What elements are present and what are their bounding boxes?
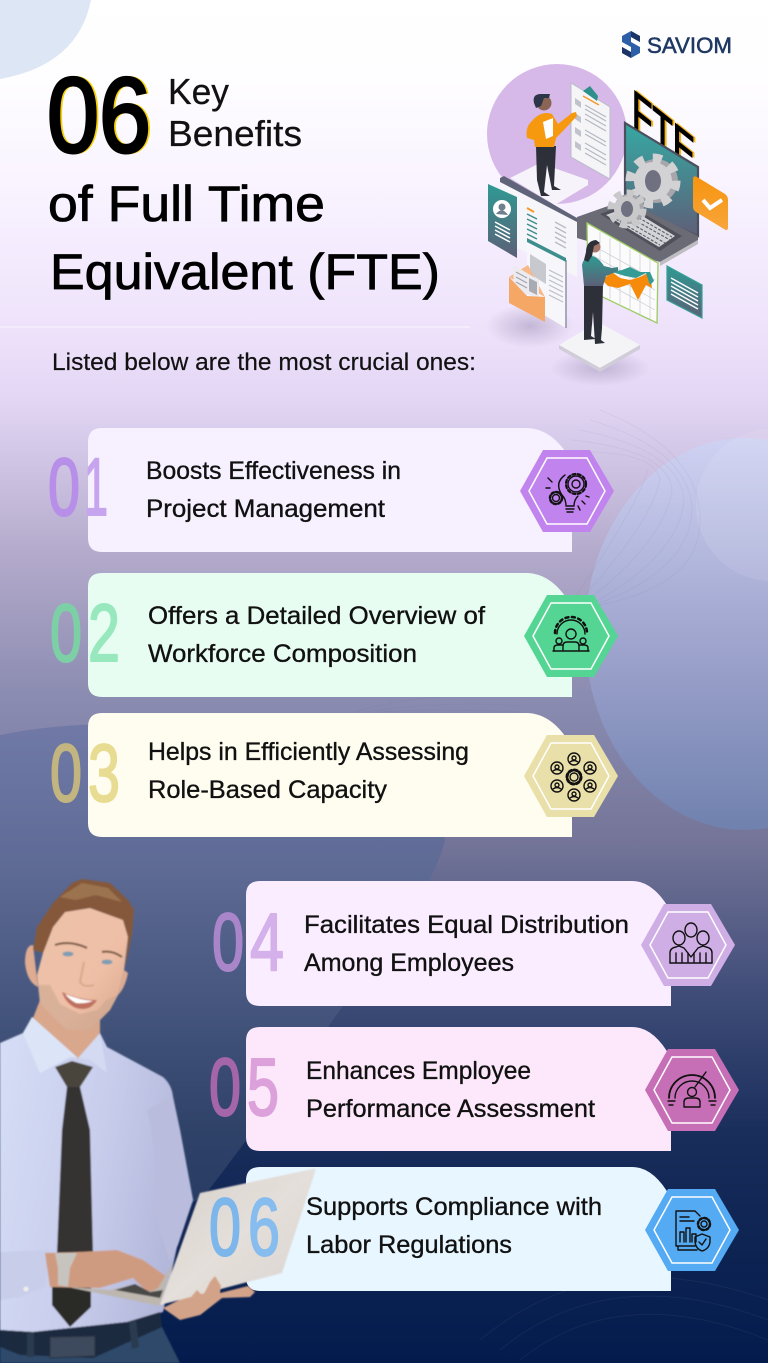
panel: benefit 04: Facilitates Equal Distribution (304, 911, 629, 939)
FTE letters: FTE (634, 78, 697, 189)
FTE letters (632, 78, 697, 189)
panel: benefit 06 (246, 1167, 671, 1291)
title: Key (168, 71, 229, 112)
panel: benefit 03 (50, 713, 618, 837)
eyes and brows (55, 943, 122, 957)
panel: benefit 02: 2 (88, 588, 120, 679)
title: of Full Time (48, 176, 325, 232)
left hand (45, 1250, 167, 1292)
icon: role network (524, 735, 618, 817)
hair (33, 879, 134, 970)
belt (0, 1312, 162, 1358)
panel: benefit 01: Boosts Effectiveness in (146, 457, 401, 485)
title: Equivalent (FTE) (50, 244, 440, 300)
panel: benefit 03: Role-Based Capacity (148, 776, 388, 804)
panel: benefit 01: 0 (48, 442, 80, 533)
document stack (527, 238, 566, 328)
platform (559, 322, 640, 368)
trousers (0, 1327, 180, 1363)
icon: lightbulb with gears (520, 450, 614, 532)
teal note (667, 266, 702, 318)
text and number: benefit 06: 0 (209, 1182, 241, 1273)
panel: benefit 05: Performance Assessment (306, 1095, 595, 1123)
right hand fingers over lid (192, 1276, 221, 1314)
panel: benefit 03: 3 (88, 728, 120, 819)
subtitle: Listed below are the most crucial ones: (52, 349, 476, 376)
panel: benefit 02 (50, 573, 618, 697)
ears (25, 945, 38, 987)
panel: benefit 02: Workforce Composition (148, 640, 417, 668)
woman (582, 240, 618, 344)
icon: compliance document and shield (645, 1189, 739, 1271)
panel: benefit 01: 1 (84, 442, 108, 533)
mouth (62, 992, 97, 1009)
decorative corner circle (0, 0, 91, 79)
photo: businessman with laptop (0, 879, 315, 1363)
chart board (587, 223, 658, 323)
profile card and window (488, 176, 577, 277)
nose (80, 962, 94, 986)
title (47, 55, 440, 300)
panel: benefit 04: 0 (212, 897, 244, 988)
text and number: benefit 06 (209, 1182, 739, 1273)
cuff (0, 1250, 50, 1300)
panel: benefit 05: Enhances Employee (306, 1057, 531, 1085)
panel: benefit 05: 5 (247, 1042, 279, 1133)
icon: team (641, 904, 735, 986)
laptop base (68, 1262, 173, 1306)
text and number: benefit 06: Supports Compliance with (306, 1193, 602, 1221)
face (37, 908, 128, 1030)
title: Benefits (168, 113, 302, 154)
title: 06 (49, 55, 153, 175)
illustration: FTE isometric workspace (486, 64, 728, 386)
panel: benefit 03: Helps in Efficiently Assessing (148, 738, 469, 766)
purple circle (487, 64, 627, 204)
shirt (0, 1017, 193, 1332)
platform (510, 163, 588, 205)
icon: performance gauge (645, 1049, 739, 1131)
panel: benefit 04: Among Employees (304, 949, 514, 977)
icon: workforce gear (524, 595, 618, 677)
panel: benefit 05: 0 (209, 1042, 241, 1133)
logo: Saviom: SAVIOM (647, 33, 732, 58)
panel: benefit 03: 0 (50, 728, 82, 819)
laptop (577, 123, 698, 266)
panel: benefit 04: 4 (250, 897, 284, 988)
orange tag (693, 176, 728, 230)
text and number: benefit 06: Labor Regulations (306, 1231, 512, 1259)
collar (23, 1017, 78, 1073)
tie (57, 1087, 93, 1253)
laptop lid (160, 1169, 315, 1305)
envelope (509, 265, 545, 322)
right hand (163, 1277, 255, 1320)
panel: benefit 02: 0 (50, 588, 82, 679)
neck (33, 1000, 100, 1059)
panel: benefit 02: Offers a Detailed Overview of (148, 602, 485, 630)
panel: benefit 01 (48, 428, 614, 552)
panel: benefit 05 (209, 1027, 739, 1151)
title: 06 (47, 55, 151, 175)
gears (630, 158, 678, 204)
panel: benefit 01: Project Management (146, 495, 385, 523)
man (526, 94, 577, 196)
text and number: benefit 06: 6 (248, 1182, 280, 1273)
panel: benefit 04 (212, 881, 735, 1006)
FTE letters: FTE (632, 78, 695, 189)
clipboard (571, 83, 610, 179)
watch (55, 1253, 77, 1287)
